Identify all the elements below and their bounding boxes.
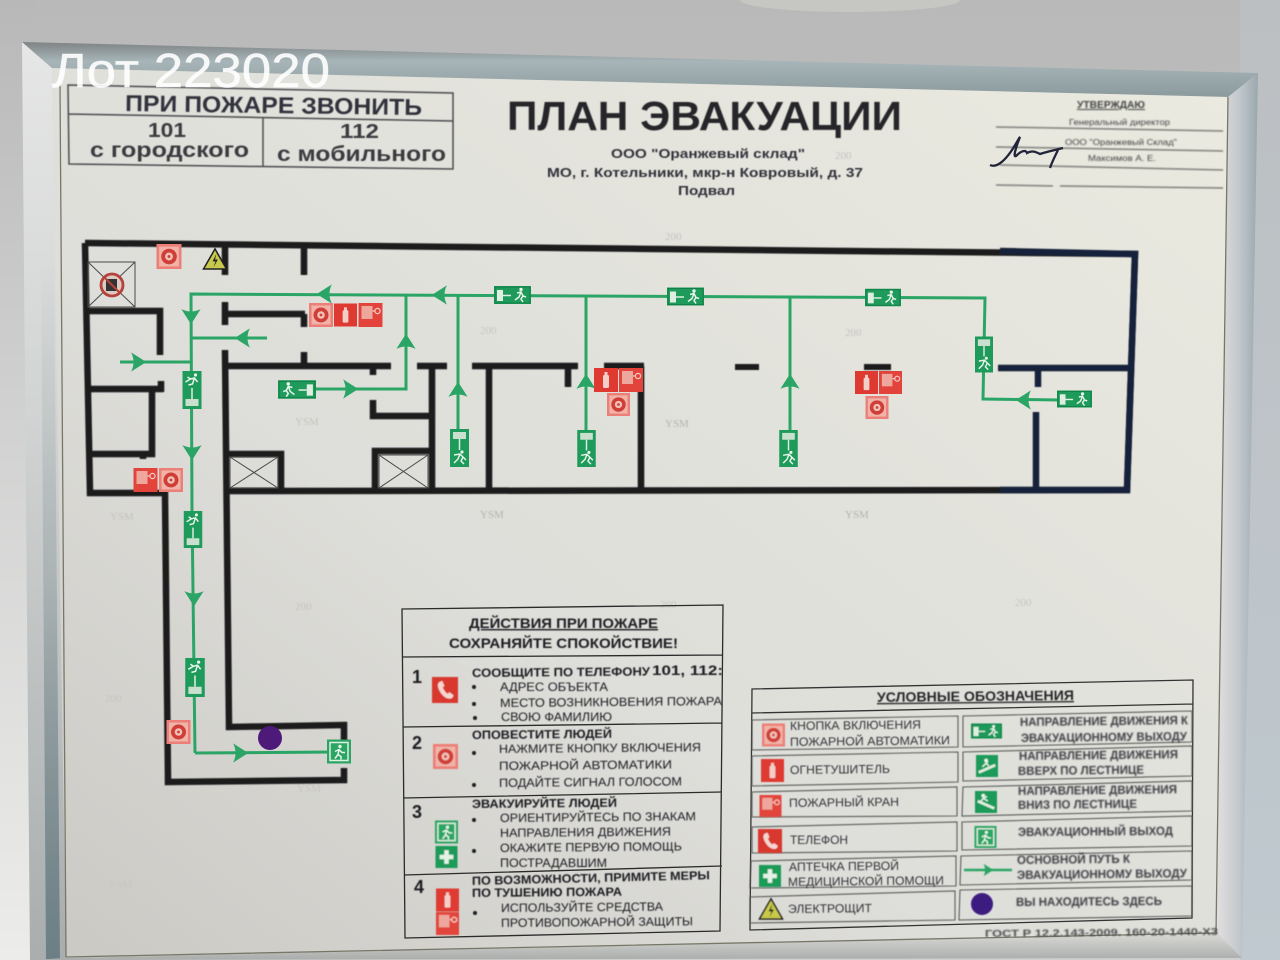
legend left column labels: ПОЖАРНЫЙ КРАН [789, 794, 899, 810]
legend right column labels: ЭВАКУАЦИОННОМУ ВЫХОДУ [1017, 866, 1188, 882]
legend left column labels [788, 718, 950, 916]
signature [990, 137, 1063, 168]
faint watermarks: 200 [105, 693, 122, 705]
faint watermarks: YSM [108, 879, 132, 891]
step 2: ПОЖАРНОЙ АВТОМАТИКИ [499, 756, 672, 773]
faint watermarks: YSM [480, 509, 504, 521]
legend right column labels: ЭВАКУАЦИОННОМУ ВЫХОДУ [1021, 729, 1188, 745]
legend right column labels: ЭВАКУАЦИОННЫЙ ВЫХОД [1018, 823, 1173, 839]
faint watermarks: 200 [295, 601, 312, 613]
legend left column labels: ЭЛЕКТРОЩИТ [788, 901, 873, 916]
step 1: СВОЮ ФАМИЛИЮ [501, 710, 612, 724]
legend left column labels: КНОПКА ВКЛЮЧЕНИЯ [790, 718, 921, 733]
legend left column labels: АПТЕЧКА ПЕРВОЙ [789, 858, 899, 874]
evacuation route [120, 294, 1060, 753]
legend cell borders [750, 711, 1192, 923]
step 4: ПРОТИВОПОЖАРНОЙ ЗАЩИТЫ [501, 913, 693, 930]
route arrows [131, 284, 1031, 763]
legend right column labels: НАПРАВЛЕНИЕ ДВИЖЕНИЯ [1018, 782, 1177, 798]
legend left column labels: ТЕЛЕФОН [790, 833, 848, 847]
step 4: 4 [414, 877, 424, 897]
floor plan walls [85, 243, 1135, 782]
step 4: ИСПОЛЬЗУЙТЕ СРЕДСТВА [501, 899, 663, 915]
approval block: ООО "Оранжевый Склад" [1065, 138, 1177, 147]
heading: call number: ПРИ ПОЖАРЕ ЗВОНИТЬ [125, 90, 422, 120]
no lift sign [101, 274, 123, 296]
actions heading: ДЕЙСТВИЯ ПРИ ПОЖАРЕ [469, 614, 658, 631]
faint watermarks: 200 [480, 325, 497, 337]
title: ПЛАН ЭВАКУАЦИИ [507, 93, 902, 139]
step 2: 2 [412, 733, 422, 753]
legend heading: УСЛОВНЫЕ ОБОЗНАЧЕНИЯ [877, 687, 1074, 705]
legend icons [758, 723, 1012, 919]
legend right column labels: ВВЕРХ ПО ЛЕСТНИЦЕ [1018, 763, 1144, 778]
step 1 [412, 662, 723, 724]
you are here marker [258, 726, 282, 750]
lift shafts [88, 262, 428, 488]
panel: legend [750, 680, 1193, 930]
approval block [996, 100, 1223, 188]
faint watermarks: YSM [297, 783, 321, 795]
legend right column labels: ВЫ НАХОДИТЕСЬ ЗДЕСЬ [1016, 894, 1162, 909]
step 3: ЭВАКУИРУЙТЕ ЛЮДЕЙ [472, 795, 617, 811]
step 3: НАПРАВЛЕНИЯ ДВИЖЕНИЯ [500, 825, 671, 840]
faint watermarks [105, 150, 1032, 891]
step 2: ОПОВЕСТИТЕ ЛЮДЕЙ [472, 726, 612, 742]
faint watermarks: 200 [835, 150, 852, 162]
number 112: 112 [340, 121, 379, 143]
actions heading: СОХРАНЯЙТЕ СПОКОЙСТВИЕ! [449, 634, 678, 651]
organization and address: ООО "Оранжевый склад" [611, 146, 805, 161]
step 4: ПО ТУШЕНИЮ ПОЖАРА [472, 885, 622, 900]
step 3 [412, 795, 696, 870]
legend left column labels: МЕДИЦИНСКОЙ ПОМОЩИ [788, 872, 944, 889]
step 1: АДРЕС ОБЪЕКТА [500, 680, 608, 694]
legend right column labels [1016, 713, 1189, 909]
step 1: МЕСТО ВОЗНИКНОВЕНИЯ ПОЖАРА [500, 694, 722, 710]
lot watermark: Лот 223020 [52, 45, 330, 98]
electrical panel marker [204, 249, 226, 269]
number 101: 101 [148, 120, 186, 142]
step 4 [414, 868, 710, 930]
faint watermarks: 200 [660, 599, 677, 611]
step 1: 101, 112: [652, 662, 723, 678]
legend right column labels: ВНИЗ ПО ЛЕСТНИЦЕ [1018, 797, 1137, 812]
faint watermarks: 200 [845, 327, 862, 339]
legend left column labels: ПОЖАРНОЙ АВТОМАТИКИ [790, 732, 950, 749]
legend right column labels: НАПРАВЛЕНИЕ ДВИЖЕНИЯ [1019, 747, 1178, 763]
legend left column labels: ОГНЕТУШИТЕЛЬ [790, 762, 890, 777]
faint watermarks: YSM [295, 416, 319, 428]
approval block: УТВЕРЖДАЮ [1077, 100, 1145, 111]
actions heading [449, 614, 678, 651]
city phone label: с городского [90, 139, 249, 162]
green direction signs [182, 286, 1092, 697]
actions icons [432, 677, 459, 935]
step 3: 3 [412, 802, 422, 822]
organization and address: Подвал [678, 183, 735, 198]
faint watermarks: 200 [1015, 597, 1032, 609]
standard reference: ГОСТ Р 12.2.143-2009. 160-20-1440-Х3 [985, 926, 1218, 940]
step 3: ОРИЕНТИРУЙТЕСЬ ПО ЗНАКАМ [500, 808, 696, 825]
approval block: Генеральный директор [1069, 118, 1171, 127]
step 1: СООБЩИТЕ ПО ТЕЛЕФОНУ [472, 664, 651, 680]
step 3: ПОСТРАДАВШИМ [500, 856, 607, 870]
legend right column labels: НАПРАВЛЕНИЕ ДВИЖЕНИЯ К [1020, 713, 1189, 729]
faint watermarks: YSM [665, 418, 689, 430]
phone box: call when fire [68, 85, 453, 169]
organization and address [547, 146, 863, 198]
faint watermarks: YSM [845, 509, 869, 521]
exit sign [327, 740, 351, 764]
legend right column labels: ОСНОВНОЙ ПУТЬ К [1017, 851, 1131, 867]
faint watermarks: 200 [665, 231, 682, 243]
step 2: НАЖМИТЕ КНОПКУ ВКЛЮЧЕНИЯ [499, 740, 701, 756]
organization and address: МО, г. Котельники, мкр-н Ковровый, д. 37 [547, 165, 863, 180]
step 2: ПОДАЙТЕ СИГНАЛ ГОЛОСОМ [499, 773, 682, 790]
approval block: Максимов А. Е. [1088, 154, 1156, 163]
step 3: ОКАЖИТЕ ПЕРВУЮ ПОМОЩЬ [500, 839, 682, 855]
faint watermarks: YSM [110, 511, 134, 523]
mobile phone label: с мобильного [277, 143, 446, 166]
step 2 [412, 726, 701, 790]
step 4: ПО ВОЗМОЖНОСТИ, ПРИМИТЕ МЕРЫ [472, 868, 710, 888]
panel: actions in fire [402, 605, 723, 938]
step 1: 1 [412, 667, 422, 687]
fire equipment markers [134, 244, 902, 744]
